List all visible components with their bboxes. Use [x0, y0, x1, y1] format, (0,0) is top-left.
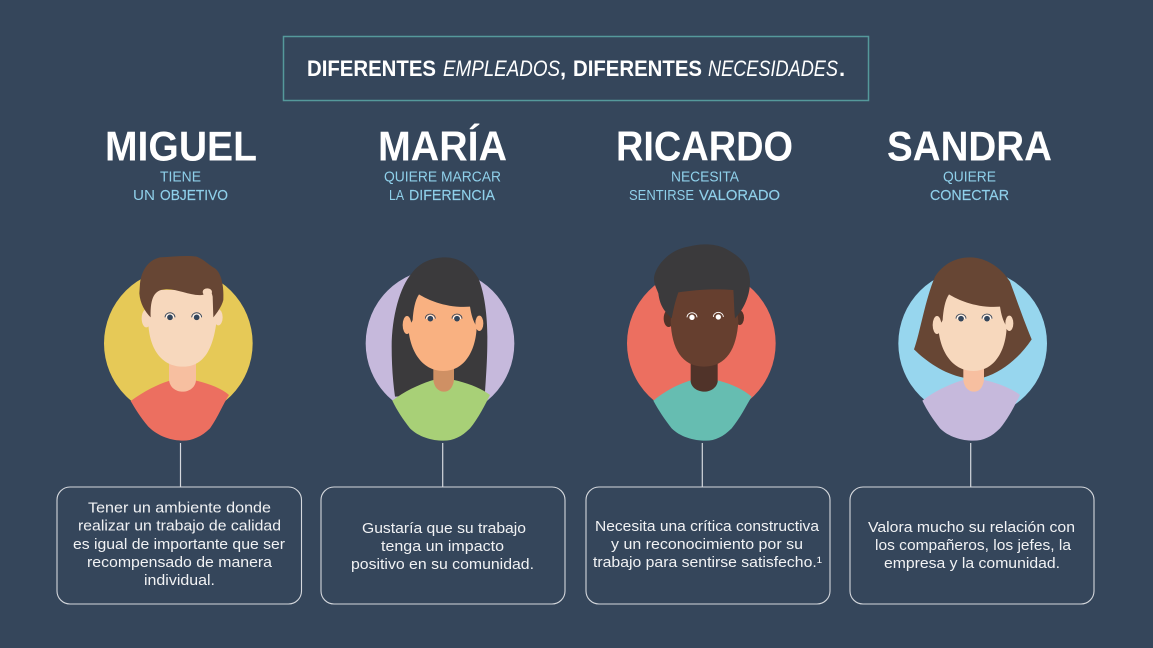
subtitle: Ricardo: VALORADO — [699, 187, 780, 204]
text box: Ricardo — [586, 487, 830, 604]
panel: Ricardo — [586, 123, 830, 604]
title box: NECESIDADES — [708, 56, 838, 81]
text box: Ricardo: y un reconocimiento por su — [611, 536, 803, 553]
subtitle: María — [384, 169, 501, 204]
avatar: María — [366, 257, 514, 441]
text box: Miguel: realizar un trabajo de calidad — [78, 518, 281, 534]
subtitle: Ricardo — [629, 169, 780, 204]
text box: Miguel: recompensado de manera — [87, 554, 273, 571]
title box: . — [839, 56, 845, 81]
connector: María — [442, 443, 444, 487]
subtitle: Miguel: UN — [133, 187, 155, 204]
panel: María — [321, 123, 565, 604]
subtitle: María: LA — [389, 187, 404, 204]
connector: Ricardo — [701, 443, 703, 487]
text box: Sandra — [850, 487, 1094, 604]
subtitle: María: QUIERE MARCAR — [384, 169, 501, 186]
subtitle: Miguel: OBJETIVO — [160, 187, 228, 204]
text box: Ricardo: trabajo para sentirse satisfecho.¹ — [593, 554, 822, 571]
name: Sandra: SANDRA — [887, 123, 1052, 170]
title box — [284, 36, 868, 100]
subtitle: Ricardo: SENTIRSE — [629, 187, 694, 204]
subtitle: Sandra: QUIERE — [943, 169, 996, 186]
text box: Miguel: individual. — [144, 572, 215, 589]
title box: , — [560, 56, 566, 81]
text box: María: tenga un impacto — [381, 538, 504, 555]
panel: Sandra — [850, 123, 1094, 604]
subtitle: Miguel: TIENE — [160, 169, 201, 186]
text box: Miguel: Tener un ambiente donde — [88, 500, 271, 516]
text box: Sandra: empresa y la comunidad. — [884, 555, 1060, 572]
avatar: Ricardo — [627, 244, 776, 441]
avatar: Miguel — [104, 256, 253, 441]
text box: Sandra: los compañeros, los jefes, la — [875, 537, 1072, 554]
text box: María — [321, 487, 565, 604]
subtitle: Ricardo: NECESITA — [671, 169, 739, 186]
subtitle: Miguel — [133, 169, 228, 204]
subtitle: Sandra — [930, 169, 1009, 204]
text box: María: positivo en su comunidad. — [351, 556, 534, 573]
name: Ricardo: RICARDO — [616, 123, 793, 170]
text box: María: Gustaría que su trabajo — [362, 520, 526, 537]
text box: Miguel — [57, 487, 302, 604]
connector: Miguel — [180, 443, 182, 487]
subtitle: Sandra: CONECTAR — [930, 187, 1009, 204]
avatar: Sandra — [898, 257, 1047, 441]
panel: Miguel — [57, 123, 302, 604]
text box: Miguel: es igual de importante que ser — [73, 536, 285, 553]
title box: DIFERENTES — [307, 56, 436, 81]
title box: EMPLEADOS — [443, 56, 560, 81]
text box: Ricardo: Necesita una crítica constructiva — [595, 518, 820, 535]
name: María: MARÍA — [378, 123, 507, 170]
connector: Sandra — [970, 443, 972, 487]
subtitle: María: DIFERENCIA — [409, 187, 495, 204]
title box: DIFERENTES — [573, 56, 702, 81]
text box: Sandra: Valora mucho su relación con — [868, 519, 1075, 536]
name: Miguel: MIGUEL — [105, 123, 257, 170]
